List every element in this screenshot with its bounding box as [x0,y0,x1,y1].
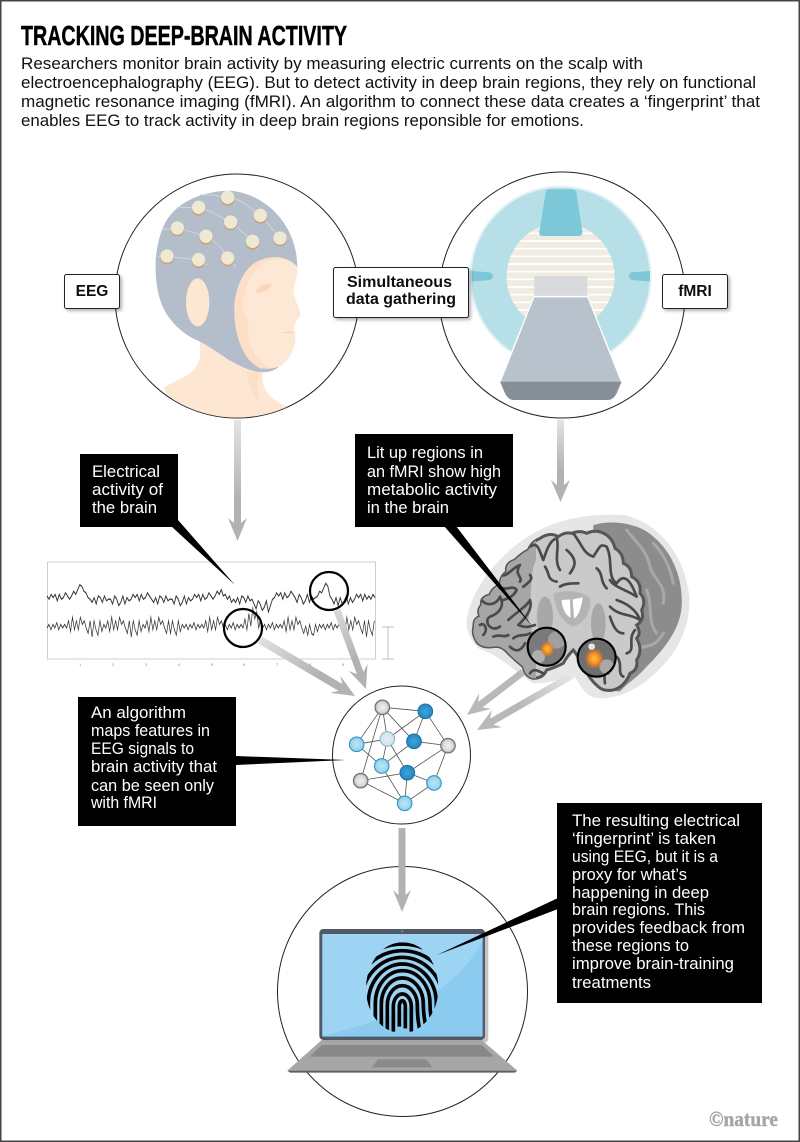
callout: electrical activity: Electrical [92,463,160,481]
callout: algorithm: brain activity that [91,758,217,776]
credit: nature logo: ©nature [709,1107,778,1131]
label: simultaneous data gathering: data gathering [346,291,456,308]
callout: algorithm: An algorithm [91,704,186,722]
callout: fingerprint: treatments [572,974,651,992]
callout: electrical activity: the brain [92,499,157,517]
illustration: MRI scanner [471,187,651,400]
chart: EEG traces: 1 [79,662,82,667]
callout: electrical activity: activity of [92,481,163,499]
title: TRACKING DEEP-BRAIN ACTIVITY [21,20,347,51]
callout: fingerprint: improve brain-training [572,955,734,973]
arrow: left brain region to network [467,669,525,715]
label: EEG: EEG [76,283,108,300]
callout: fingerprint: The resulting electrical [572,812,740,830]
callout: lit up regions: in the brain [367,499,449,517]
callout: fingerprint: happening in deep [572,884,709,902]
intro text [21,55,760,130]
chart: EEG traces: 5 [211,662,214,667]
panel: laptop circle [278,828,528,1116]
illustration: laptop with fingerprint [287,929,517,1073]
electrodes [160,191,287,268]
arrow: fMRI to brain scan [551,420,570,502]
arrow: EEG to trace [228,420,247,541]
callout: algorithm: can be seen only [91,777,215,795]
illustration: head with EEG cap [156,191,301,424]
label: fMRI [662,274,728,308]
callout: fingerprint: brain regions. This [572,901,705,919]
chart: EEG traces [47,562,394,667]
label: simultaneous data gathering: Simultaneous [347,274,452,291]
highlight circle: bottom trace [224,609,262,647]
callout: lit up regions: an fMRI show high [367,463,501,481]
chart: EEG traces: 8 [309,662,312,667]
callout: fingerprint: proxy for what’s [572,866,687,884]
callout: algorithm: with fMRI [90,794,157,812]
callout: fingerprint: provides feedback from [572,919,745,937]
label: fMRI: fMRI [678,283,712,300]
chart: EEG traces: 6 [243,662,246,667]
label: EEG [64,274,120,308]
highlight circle: top trace [310,572,348,610]
arrow: network to laptop [393,828,411,912]
callout: fingerprint [437,803,762,1003]
callout: algorithm [78,697,346,826]
intro text: enables EEG to track activity in deep brain regions reponsible for emotions. [21,112,584,130]
chart: EEG traces: 7 [276,662,279,667]
callout: lit up regions: Lit up regions in [367,444,483,462]
arrow: top trace to network [334,609,368,689]
callout: fingerprint: using EEG, but it is a [572,848,719,866]
panel: fMRI circle [439,172,685,418]
callout: algorithm: maps features in [91,722,210,740]
chart: EEG traces: 3 [145,662,148,667]
highlighted region: right [578,639,616,677]
icon: fingerprint [366,942,438,1032]
brain scan [467,515,689,698]
callout: algorithm: EEG signals to [91,740,194,758]
callout: fingerprint: these regions to [572,937,689,955]
callout: lit up regions [355,434,533,627]
intro text: electroencephalography (EEG). But to detect activity in deep brain regions, they rely on functional [21,74,756,92]
intro text: magnetic resonance imaging (fMRI). An algorithm to connect these data creates a ‘fingerprint’ that [21,93,760,111]
arrow: right brain region to network [477,672,575,730]
panel: EEG circle [115,174,359,424]
panel: algorithm network circle [332,686,470,824]
network diagram [349,700,455,811]
highlighted region: left [528,628,566,666]
callout: fingerprint: ‘fingerprint’ is taken [572,830,716,848]
intro text: Researchers monitor brain activity by measuring electric currents on the scalp with [21,55,643,73]
chart: EEG traces: 9 [342,662,345,667]
chart: EEG traces: 2 [112,662,115,667]
arrow: bottom trace to network [258,637,355,696]
callout: lit up regions: metabolic activity [367,481,498,499]
label: simultaneous data gathering [334,268,468,318]
callout: electrical activity [80,454,235,585]
chart: EEG traces: 4 [178,662,181,667]
